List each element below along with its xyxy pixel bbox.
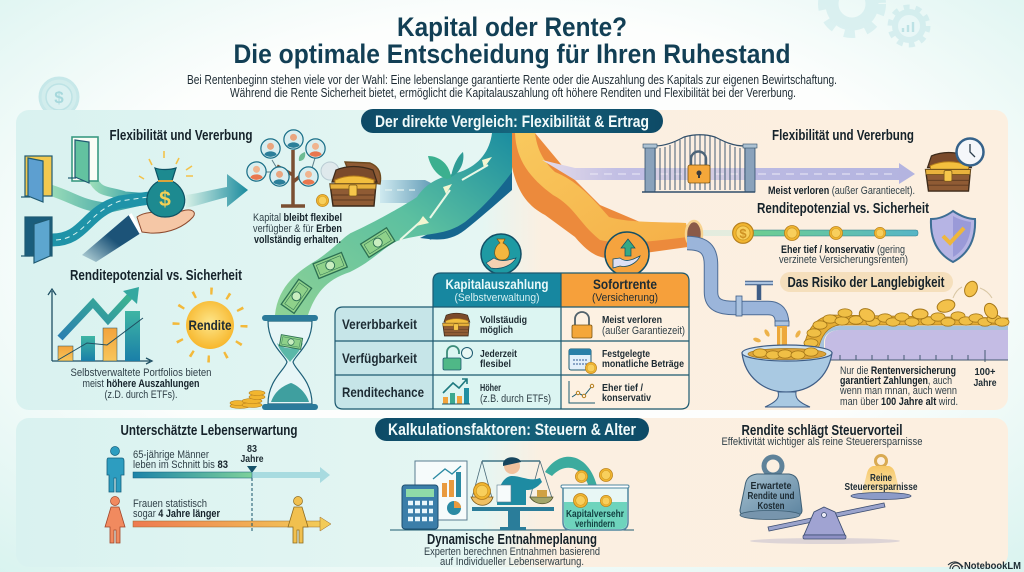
icon: advisor with scales: [471, 457, 554, 530]
section pill: direct comparison: [361, 109, 663, 133]
label: 83 years: 83: [247, 443, 257, 455]
icon: sun with Rendite: [176, 291, 244, 359]
intro text: Während die Rente Sicherheit bietet, ermöglicht die Kapitalauszahlung oft höhere Renditen und Flexibilität bei der Vererbung.: [230, 86, 796, 100]
row: Renditechance: (z.B. durch ETFs): [480, 393, 551, 405]
row: Verfügbarkeit: flesibel: [480, 358, 511, 370]
heading: Renditepotenzial left: Renditepotenzial vs. Sicherheit: [70, 267, 242, 284]
text: mostly lost: Meist verloren (außer Garantiecelt).: [768, 185, 915, 197]
icon: decorative dollar coin: [40, 78, 78, 116]
row: Vererbbarkeit: möglich: [480, 324, 513, 336]
icon: light weight: Reine: [870, 473, 892, 484]
text: longevity: Nur die Rentenversicherung: [840, 365, 956, 377]
icon: beaker: Kapitalversehr: [566, 509, 624, 520]
table header: Sofortrente: [561, 273, 689, 307]
row: Vererbbarkeit: (außer Garantiezeit): [602, 325, 685, 337]
icon: basin: [742, 345, 832, 407]
row: Vererbbarkeit: Vollstäudig: [480, 314, 527, 326]
text: men: 65-jährige Männer: [133, 449, 209, 461]
text: men: leben im Schnitt bis 83: [133, 459, 228, 471]
text: self-managed portfolios: (z.D. durch ETFs).: [104, 389, 178, 401]
text: capital stays flexible: verfügber & für Erben: [253, 223, 342, 235]
table header: Kapitalauszahlung: (Selbstverwaltung): [454, 292, 540, 304]
text: rather low: [779, 244, 908, 266]
text: 100+ years: 100+: [974, 366, 996, 378]
table body: [335, 307, 433, 409]
heading pill: longevity: [780, 272, 953, 292]
row: Verfügbarkeit: Jederzeit: [480, 348, 517, 360]
text: women: Frauen statistisch: [133, 498, 207, 510]
icon: heavy weight: Kosten: [758, 500, 784, 512]
icon: woman red: [105, 496, 125, 543]
table header: Kapitalauszahlung: [433, 273, 561, 307]
intro text: Bei Rentenbeginn stehen viele vor der Wahl: Eine lebenslange garantierte Rente oder die Auszahlung des Kapitals zur eigenen Bewirtschaftung.: [187, 73, 837, 87]
label: 83 years: [240, 443, 264, 473]
chart: growth bars: [48, 287, 152, 364]
text: 100+ years: [974, 366, 997, 389]
river: rente orange ribbon: [512, 133, 688, 258]
title: Die optimale Entscheidung für Ihren Ruhestand: [234, 39, 790, 69]
text: capital stays flexible: [253, 212, 342, 246]
heading: Flexibilität right: Flexibilität und Vererbung: [772, 127, 914, 144]
panel: calculation factors: [16, 418, 1008, 567]
text: experts: auf Individueller Lebenserwartung.: [440, 556, 584, 568]
title: [234, 12, 790, 69]
text: longevity: wenn man mnan, auch wenn: [839, 385, 957, 397]
bar: women life expectancy: [133, 517, 331, 531]
icon: annuity circle: [605, 232, 649, 276]
icon: light weight: [844, 456, 918, 500]
heading: return beats tax: Rendite schlägt Steuervorteil: [742, 422, 902, 439]
table header: Sofortrente: Sofortrente: [593, 276, 657, 292]
text: self-managed portfolios: meist höhere Auszahlungen: [82, 378, 200, 390]
icon: heavy weight: Rendite und: [748, 490, 794, 502]
section pill: calculation factors: Kalkulationsfaktoren: Steuern & Alter: [388, 420, 636, 439]
text: longevity: man über 100 Jahre alt wird.: [840, 396, 958, 408]
icon: heavy weight: [740, 457, 802, 520]
chart: coin line: [700, 223, 918, 243]
table header: Kapitalauszahlung: Kapitalauszahlung: [446, 276, 548, 292]
river: kapital green ribbon: [275, 133, 512, 315]
icon: heavy weight: Erwartete: [750, 480, 792, 492]
icon: door teal: [21, 217, 52, 263]
icon: light weight: Steuerersparnisse: [844, 482, 918, 493]
text: men: [133, 449, 228, 471]
text: experts: [424, 546, 600, 568]
icon: door green: [68, 137, 98, 183]
row: Renditechance: konservativ: [602, 392, 651, 404]
icon: sun with Rendite: Rendite: [188, 317, 232, 333]
label: 83 years: Jahre: [240, 453, 264, 465]
section pill: direct comparison: Der direkte Vergleich: Flexibilität & Ertrag: [375, 112, 649, 131]
icon: hand with money bag: $: [159, 188, 171, 211]
heading: Renditepotenzial right: Renditepotenzial vs. Sicherheit: [757, 200, 929, 217]
arrow: to beaker: [545, 457, 603, 497]
row: Renditechance: Eher tief /: [602, 382, 643, 394]
text: women: sogar 4 Jahre länger: [133, 508, 221, 520]
icon: pipe and faucet: [686, 221, 802, 354]
icon: family tree: [247, 130, 339, 206]
row: Vererbbarkeit: Meist verloren: [602, 314, 662, 326]
bar: men life expectancy: [133, 467, 330, 483]
icon: door blue: [21, 156, 52, 202]
text: experts: Experten berechnen Entnahmen basierend: [424, 546, 600, 558]
icon: doors and roads: [21, 137, 150, 263]
arrow: purple road: [542, 160, 915, 184]
divider: 83 marker: [251, 478, 253, 533]
icon: hand with money bag: [82, 151, 194, 262]
chart: coin line: $: [739, 226, 747, 241]
text: women: [133, 498, 221, 520]
text: longevity: [839, 365, 958, 408]
icon: locked gate: [642, 135, 757, 192]
row: Renditechance: [342, 379, 651, 405]
chart: coin trough longevity: [803, 279, 1009, 362]
icon: balance scale: [740, 456, 918, 544]
row: Renditechance: Renditechance: [342, 384, 424, 400]
panel: direct comparison: [16, 110, 1008, 410]
icon: beaker: verhindern: [575, 519, 615, 530]
row: Verfügbarkeit: Verfügbarkeit: [342, 350, 417, 366]
text: capital stays flexible: vollständig erhalten.: [254, 234, 341, 246]
icon: decorative dollar coin: $: [54, 88, 64, 107]
heading: life expectancy: Unterschätzte Lebenserwartung: [120, 422, 298, 439]
icon: shield: [931, 211, 975, 262]
icon: hourglass: [230, 315, 318, 410]
row: Verfügbarkeit: [342, 346, 684, 374]
icon: treasure chest with clock: [926, 138, 984, 191]
icon: man: [107, 446, 124, 492]
icon: woman yellow: [288, 496, 308, 543]
table header: Sofortrente: (Versicherung): [592, 292, 658, 304]
icon: decorative gears top right: [822, 0, 928, 45]
icon: payout circle: [481, 234, 521, 274]
text: capital stays flexible: Kapital bleibt flexibel: [253, 212, 342, 224]
icon: beaker: [561, 468, 629, 530]
heading: dynamic withdrawal: Dynamische Entnahmeplanung: [427, 531, 597, 548]
icon: treasure chest left: [316, 162, 381, 207]
text: effectiveness: Effektivität wichtiger als reine Steuerersparnisse: [722, 436, 922, 448]
text: rather low: Eher tief / konservativ (gering: [781, 244, 905, 256]
heading: Flexibilität left: Flexibilität und Vererbung: [110, 127, 252, 144]
text: 100+ years: Jahre: [974, 377, 997, 389]
row: Verfügbarkeit: Festgelegte: [602, 348, 650, 360]
icon: calculator and report: [390, 461, 634, 530]
text: self-managed portfolios: [70, 367, 212, 401]
row: Vererbbarkeit: [342, 312, 685, 338]
row: Vererbbarkeit: Vererbbarkeit: [342, 316, 417, 332]
text: rather low: verzinete Versicherungsrenten): [779, 254, 908, 266]
text: self-managed portfolios: Selbstverwaltete Portfolios bieten: [70, 367, 212, 379]
intro text: [187, 73, 837, 100]
text: longevity: garantiert Zahlungen, auch: [840, 375, 952, 387]
arrow: money to heirs: [186, 174, 248, 208]
table: comparison: [335, 273, 689, 409]
row: Verfügbarkeit: monatliche Beträge: [602, 358, 684, 370]
row: Renditechance: Höher: [480, 382, 501, 394]
title: Kapital oder Rente?: [397, 12, 627, 42]
heading pill: longevity: Das Risiko der Langlebigkeit: [788, 274, 944, 291]
